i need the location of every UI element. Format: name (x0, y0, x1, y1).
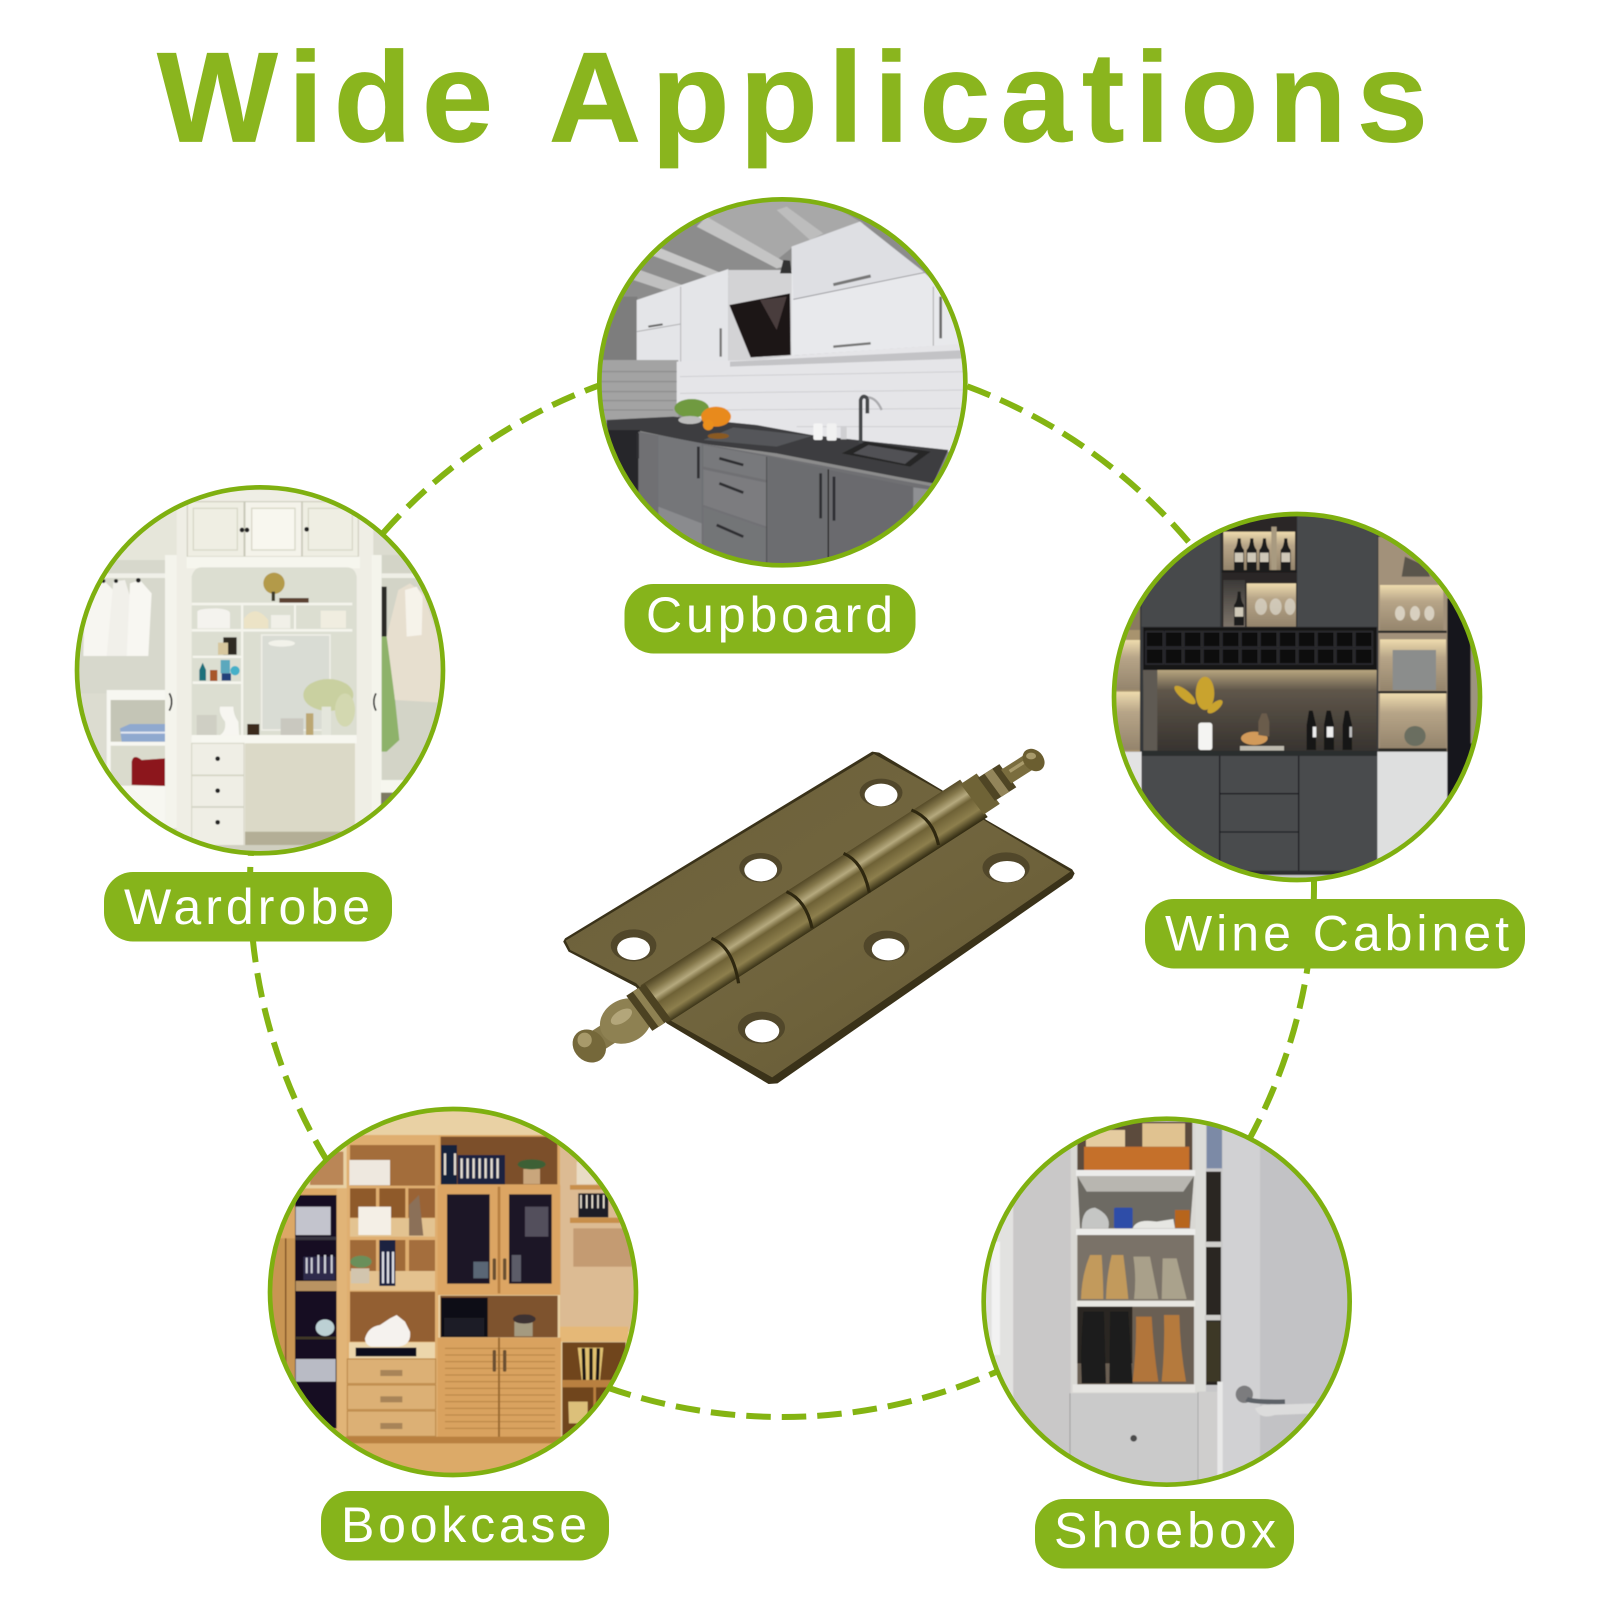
panel: cupboard (590, 190, 980, 580)
label: Bookcase: Bookcase (341, 1497, 587, 1553)
dashed connecting ring (250, 353, 1314, 1417)
photo: white wardrobe (79, 490, 441, 851)
label: Shoebox: Shoebox (1054, 1502, 1276, 1558)
photo: dark wine cabinet (1116, 516, 1478, 878)
ring (984, 1119, 1350, 1485)
ring (599, 199, 965, 565)
hinge plate (563, 752, 1075, 1084)
photo: kitchen (602, 202, 963, 563)
upper finial (972, 745, 1049, 799)
label: Bookcase (321, 1491, 609, 1560)
photo: shoe cabinet (986, 1121, 1348, 1482)
ring (1114, 514, 1480, 880)
label: Cupboard: Cupboard (646, 587, 893, 643)
title: Wide Applications (157, 27, 1438, 170)
barrel knuckles (711, 810, 939, 983)
panel: wardrobe (70, 480, 460, 870)
label: Wine Cabinet: Wine Cabinet (1165, 906, 1509, 962)
photo: wooden bookcase (272, 1111, 634, 1473)
label: Wardrobe: Wardrobe (124, 879, 370, 935)
screw holes (611, 779, 1030, 1044)
panel: shoebox (980, 1115, 1370, 1505)
lower finial (566, 989, 661, 1069)
label: Wardrobe (104, 872, 392, 942)
panel: bookcase (265, 1105, 655, 1495)
ring (270, 1109, 636, 1475)
label: Shoebox (1035, 1499, 1294, 1568)
panel: wine cabinet (1110, 510, 1500, 900)
product: brass hinge (563, 745, 1075, 1084)
hinge barrel (654, 798, 974, 1004)
ring (77, 487, 443, 853)
label: Cupboard (624, 584, 916, 654)
